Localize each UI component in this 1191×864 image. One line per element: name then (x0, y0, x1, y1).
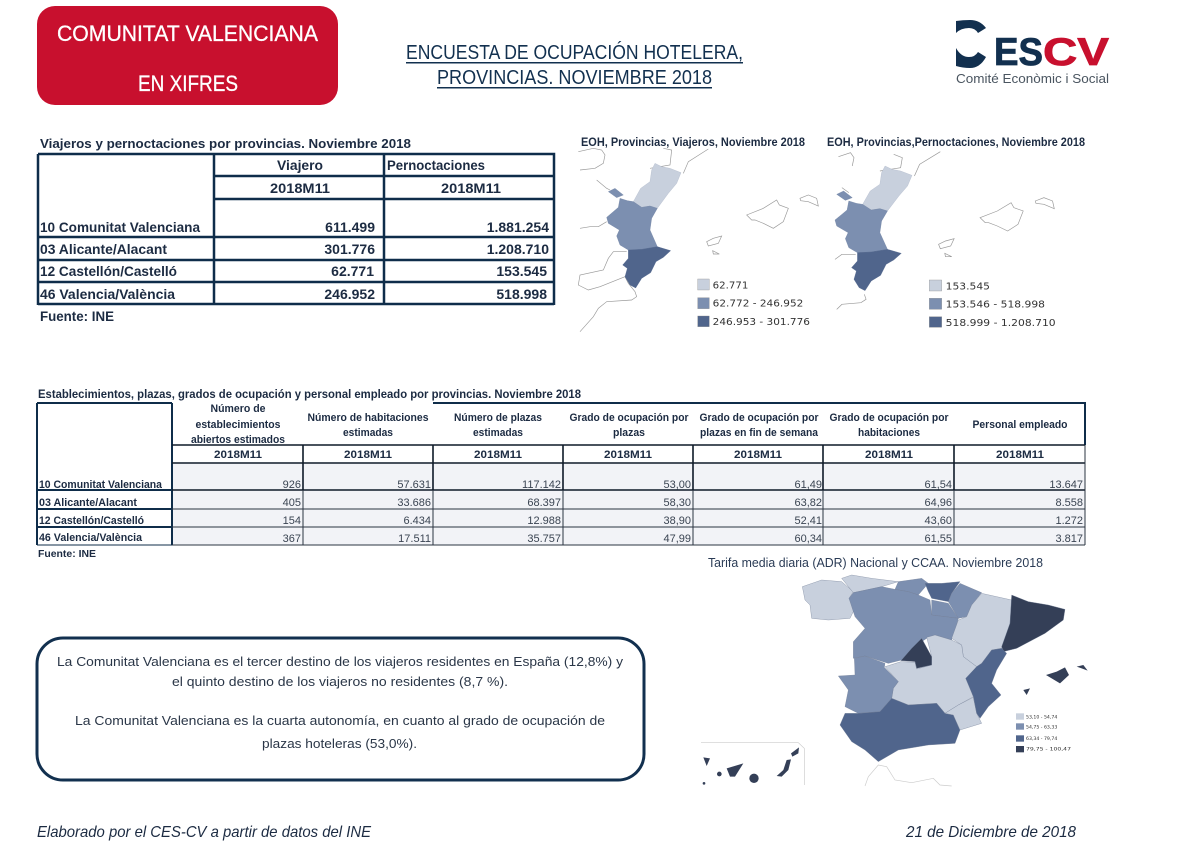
row values: 43,60 (924, 515, 952, 527)
row labels: 03 Alicante/Alacant (39, 497, 137, 509)
region: Castilla y León (849, 587, 958, 663)
callout: key findings: el quinto destino de los viajeros no residentes (8,7 %). (172, 674, 508, 689)
region: Galicia (802, 580, 855, 620)
table: travellers and overnight stays: 2018M11 (441, 181, 502, 196)
row values: 58,30 (663, 497, 691, 509)
choropleth map: pernoctaciones por provincia (835, 152, 1056, 329)
column headers: establecimientos (196, 419, 280, 431)
legend: viajeros: 246.953 - 301.776 (713, 317, 810, 328)
period row: 2018M11 (214, 449, 262, 461)
table: travellers and overnight stays: 1.881.254 (487, 219, 549, 235)
row values: 35.757 (527, 533, 561, 545)
row values: 13.647 (1049, 479, 1083, 491)
column headers: Grado de ocupación por (830, 412, 949, 424)
table: travellers and overnight stays: Pernoctaciones (387, 158, 485, 173)
region: Extremadura (838, 656, 898, 713)
legend: viajeros (698, 279, 810, 328)
region: País Vasco (925, 582, 960, 602)
province: Castellón (863, 166, 912, 211)
map heading: pernoctaciones: EOH, Provincias,Pernoctaciones, Noviembre 2018 (827, 135, 1085, 149)
region: Madrid (901, 638, 932, 668)
row values: 33.686 (397, 497, 431, 509)
legend: pernoctaciones: 518.999 - 1.208.710 (946, 318, 1056, 329)
row values: 61,55 (924, 533, 952, 545)
map heading: ADR: Tarifa media diaria (ADR) Nacional y CCAA. Noviembre 2018 (708, 555, 1043, 570)
period row: 2018M11 (604, 449, 652, 461)
table: travellers and overnight stays: 611.499 (325, 219, 375, 235)
heading: travellers table: Viajeros y pernoctaciones por provincias. Noviembre 2018 (40, 136, 411, 151)
row values: 12.988 (527, 515, 561, 527)
table: travellers and overnight stays: 10 Comunitat Valenciana (40, 220, 200, 235)
logo: CES CV (956, 20, 1109, 86)
table: establishments, rooms, occupancy and staff (37, 403, 1085, 545)
row labels (39, 479, 163, 544)
region: Murcia (945, 697, 982, 730)
row labels: 46 Valencia/València (39, 532, 143, 544)
logo: CES CV: Comité Econòmic i Social (956, 71, 1109, 86)
row labels: 10 Comunitat Valenciana (39, 479, 163, 491)
legend: pernoctaciones: 153.546 - 518.998 (946, 300, 1045, 311)
row values: 8.558 (1055, 497, 1083, 509)
period row: 2018M11 (474, 449, 522, 461)
row values: 367 (283, 533, 301, 545)
province: Valencia (607, 188, 657, 250)
choropleth map: viajeros por provincia (578, 148, 818, 332)
column headers: Grado de ocupación por (570, 412, 689, 424)
footer: credit: Elaborado por el CES-CV a partir de datos del INE (37, 824, 371, 841)
source note: travellers table: Fuente: INE (40, 309, 114, 324)
table: travellers and overnight stays: 03 Alicante/Alacant (40, 242, 168, 257)
row values: 60,34 (794, 533, 822, 545)
row values: 61,54 (924, 479, 952, 491)
legend: ADR: 63,34 - 79,74 (1026, 736, 1058, 742)
callout: key findings: plazas hoteleras (53,0%). (262, 736, 417, 751)
table: travellers and overnight stays: 153.545 (496, 263, 547, 279)
row values: 68.397 (527, 497, 561, 509)
row values: 6.434 (403, 515, 431, 527)
legend: ADR: 53,10 - 54,74 (1026, 714, 1058, 720)
column headers: Personal empleado (972, 419, 1068, 431)
heading: establishments table: Establecimientos, plazas, grados de ocupación y personal empleado por provincias. Noviembre 2018 (38, 387, 581, 401)
row values: 63,82 (794, 497, 822, 509)
row values: 1.272 (1055, 515, 1083, 527)
table: travellers and overnight stays: 301.776 (324, 241, 375, 257)
callout: key findings (37, 638, 644, 780)
legend: ADR: 54,75 - 63,33 (1026, 724, 1058, 730)
row labels: 12 Castellón/Castelló (39, 515, 144, 527)
region: Navarra (948, 583, 982, 618)
row values: 3.817 (1055, 533, 1083, 545)
region: Asturias (842, 575, 898, 593)
callout: key findings: La Comunitat Valenciana es el tercer destino de los viajeros residentes en España (12,8%) y (57, 654, 624, 669)
legend: ADR: 79,75 - 100,47 (1026, 747, 1071, 753)
column headers: Número de (210, 403, 266, 415)
callout: key findings: La Comunitat Valenciana es la cuarta autonomía, en cuanto al grado de ocupación de (75, 713, 605, 728)
column headers (191, 403, 1068, 446)
column headers: Grado de ocupación por (700, 412, 819, 424)
region: Andalucía (840, 698, 960, 762)
row values: 926 (283, 479, 301, 491)
row values: 405 (283, 497, 301, 509)
footer: date: 21 de Diciembre de 2018 (905, 824, 1076, 841)
row values: 117.142 (522, 479, 561, 491)
period row: 2018M11 (734, 449, 782, 461)
title badge: Comunitat Valenciana en xifres: COMUNITAT VALENCIANA (57, 21, 318, 46)
table: travellers and overnight stays (38, 154, 554, 305)
legend: pernoctaciones: 153.545 (946, 281, 990, 292)
heading: survey title: ENCUESTA DE OCUPACIÓN HOTELERA, (406, 41, 743, 64)
region: Cataluña (1002, 595, 1065, 652)
province: Valencia (835, 191, 887, 253)
title badge: Comunitat Valenciana en xifres: EN XIFRES (138, 71, 238, 96)
row values: 52,41 (794, 515, 822, 527)
region: Comunitat Valenciana (966, 648, 1007, 718)
column headers: abiertos estimados (191, 434, 285, 446)
heading: survey title (406, 41, 743, 89)
legend: pernoctaciones (929, 280, 1056, 329)
column headers: habitaciones (858, 427, 920, 439)
column headers: Número de plazas (454, 412, 542, 424)
period row: 2018M11 (865, 449, 913, 461)
province: Alicante (852, 249, 901, 291)
inset: Canarias (701, 743, 804, 785)
region: Cantabria (895, 578, 928, 595)
column headers: Número de habitaciones (308, 412, 428, 424)
table: travellers and overnight stays: 62.771 (331, 263, 374, 279)
column headers: plazas en fin de semana (700, 427, 819, 439)
region: La Rioja (932, 600, 958, 618)
map heading: viajeros: EOH, Provincias, Viajeros, Noviembre 2018 (581, 135, 805, 149)
table: travellers and overnight stays: Viajero (277, 158, 323, 173)
province: Alicante (623, 247, 671, 288)
table: travellers and overnight stays: 2018M11 (270, 181, 331, 196)
table: travellers and overnight stays: 246.952 (324, 286, 375, 302)
table: travellers and overnight stays: 46 Valencia/València (40, 287, 175, 302)
row values: 38,90 (663, 515, 691, 527)
column headers: plazas (613, 427, 645, 439)
choropleth map: ADR by region (701, 575, 1088, 786)
legend: viajeros: 62.771 (713, 280, 748, 291)
row values: 61,49 (794, 479, 822, 491)
row values: 64,96 (924, 497, 952, 509)
column headers: estimadas (473, 427, 523, 439)
column headers: estimadas (343, 427, 393, 439)
table: travellers and overnight stays: 518.998 (496, 286, 547, 302)
row values: 154 (283, 515, 301, 527)
region: Aragón (952, 593, 1012, 667)
logo: CES CV: ES (994, 31, 1043, 74)
region: Castilla-La Mancha (885, 635, 977, 713)
row values (283, 479, 1083, 545)
legend: viajeros: 62.772 - 246.952 (713, 299, 803, 310)
table: travellers and overnight stays: 1.208.710 (487, 241, 549, 257)
table: travellers and overnight stays: 12 Castellón/Castelló (40, 264, 177, 279)
source note: establishments table: Fuente: INE (38, 548, 96, 560)
row values: 57.631 (397, 479, 431, 491)
region: Baleares (1023, 665, 1088, 695)
row values: 53,00 (663, 479, 691, 491)
province: Castellón (633, 163, 681, 208)
logo: CES CV: CV (1043, 31, 1109, 74)
legend: ADR (1016, 713, 1071, 753)
period row: 2018M11 (996, 449, 1044, 461)
row values: 47,99 (663, 533, 691, 545)
title badge: Comunitat Valenciana en xifres (37, 6, 338, 105)
period row: 2018M11 (344, 449, 392, 461)
heading: survey title: PROVINCIAS. NOVIEMBRE 2018 (437, 67, 712, 89)
period row (214, 449, 1044, 461)
row values: 17.511 (398, 533, 431, 545)
